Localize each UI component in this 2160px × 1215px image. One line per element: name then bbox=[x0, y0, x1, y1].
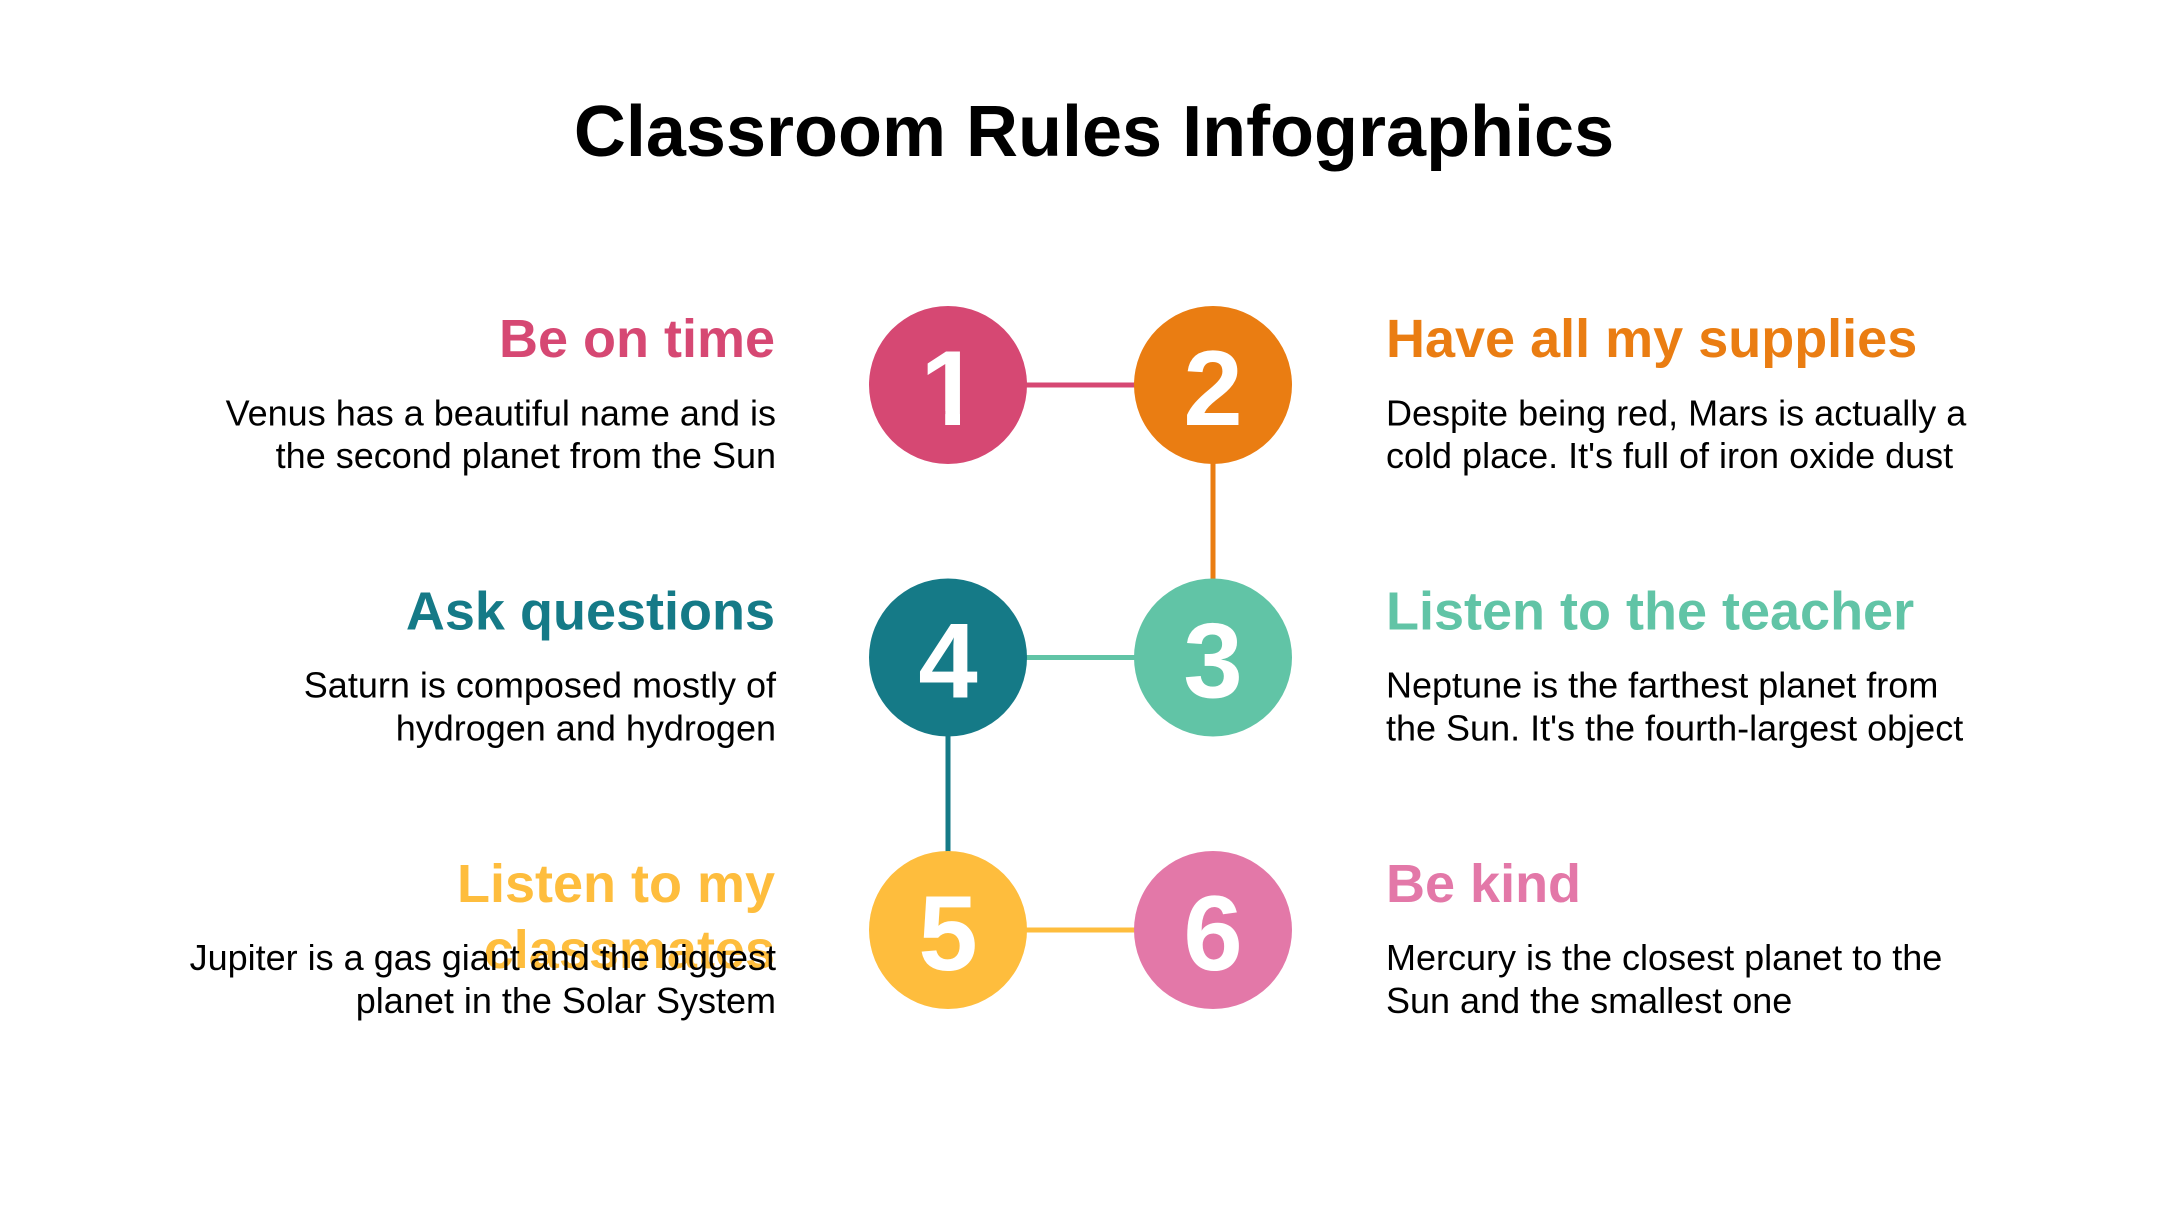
rule 3 text: Listen to the teacher: Neptune is the farthest planet from bbox=[1386, 664, 1938, 706]
rule 5 text: Listen to my classmates: planet in the Solar System bbox=[356, 980, 776, 1021]
title: Classroom Rules Infographics bbox=[574, 92, 1614, 172]
rule 2 text: Have all my supplies: cold place. It's full of iron oxide dust bbox=[1386, 435, 1953, 476]
rule 6 badge: 6 bbox=[1183, 873, 1243, 993]
connector: 2 to 3 bbox=[1210, 460, 1216, 590]
rule 3 text: Listen to the teacher: the Sun. It's the fourth-largest object bbox=[1386, 708, 1963, 748]
rule 4 text: Ask questions: Saturn is composed mostly of bbox=[304, 664, 777, 706]
rule 5 text: Listen to my classmates bbox=[190, 854, 776, 1021]
rule 6 badge bbox=[1134, 851, 1292, 1009]
rule 4 text: Ask questions: hydrogen and hydrogen bbox=[396, 708, 776, 748]
rule 2 text: Have all my supplies: Have all my supplies bbox=[1386, 309, 1917, 369]
rule 1 text: Be on time: the second planet from the Sun bbox=[276, 435, 776, 476]
rule 2 badge: 2 bbox=[1183, 328, 1243, 448]
rule 4 text: Ask questions bbox=[304, 582, 777, 748]
rule 1 badge bbox=[869, 306, 1027, 464]
connector: 5 to 6 bbox=[1020, 928, 1150, 932]
connector: 1 to 2 bbox=[1020, 382, 1150, 388]
rule 6 text: Be kind bbox=[1386, 854, 1942, 1021]
rule 3 badge: 3 bbox=[1183, 600, 1243, 720]
rule 6 text: Be kind: Sun and the smallest one bbox=[1386, 980, 1792, 1021]
rule 6 text: Be kind: Mercury is the closest planet to the bbox=[1386, 937, 1942, 978]
rule 1 badge: 1 bbox=[920, 328, 980, 448]
rule 2 badge bbox=[1134, 306, 1292, 464]
rule 3 text: Listen to the teacher: Listen to the teacher bbox=[1386, 582, 1914, 642]
rule 6 text: Be kind: Be kind bbox=[1386, 854, 1581, 914]
rule 3 badge bbox=[1134, 578, 1292, 736]
rule 3 text: Listen to the teacher bbox=[1386, 582, 1963, 748]
connector: 4 to 5 bbox=[946, 730, 950, 860]
rule 4 text: Ask questions: Ask questions bbox=[406, 582, 775, 642]
connector: 4 to 3 bbox=[1020, 655, 1150, 660]
rule 5 badge: 5 bbox=[918, 873, 978, 993]
rule 4 badge: 4 bbox=[918, 600, 978, 720]
rule 1 text: Be on time bbox=[226, 309, 776, 476]
rule 1 text: Be on time: Venus has a beautiful name and is bbox=[226, 392, 776, 434]
rule 5 text: Listen to my classmates: Listen to my bbox=[457, 854, 775, 914]
rule 1 text: Be on time: Be on time bbox=[499, 309, 775, 369]
rule 2 text: Have all my supplies: Despite being red, Mars is actually a bbox=[1386, 392, 1967, 434]
rule 5 text: Listen to my classmates: Jupiter is a gas giant and the biggest bbox=[190, 937, 776, 978]
rule 4 badge bbox=[869, 578, 1027, 736]
rule 5 text: Listen to my classmates: classmates bbox=[484, 920, 775, 980]
rule 2 text: Have all my supplies bbox=[1386, 309, 1967, 476]
rule 5 badge bbox=[869, 851, 1027, 1009]
